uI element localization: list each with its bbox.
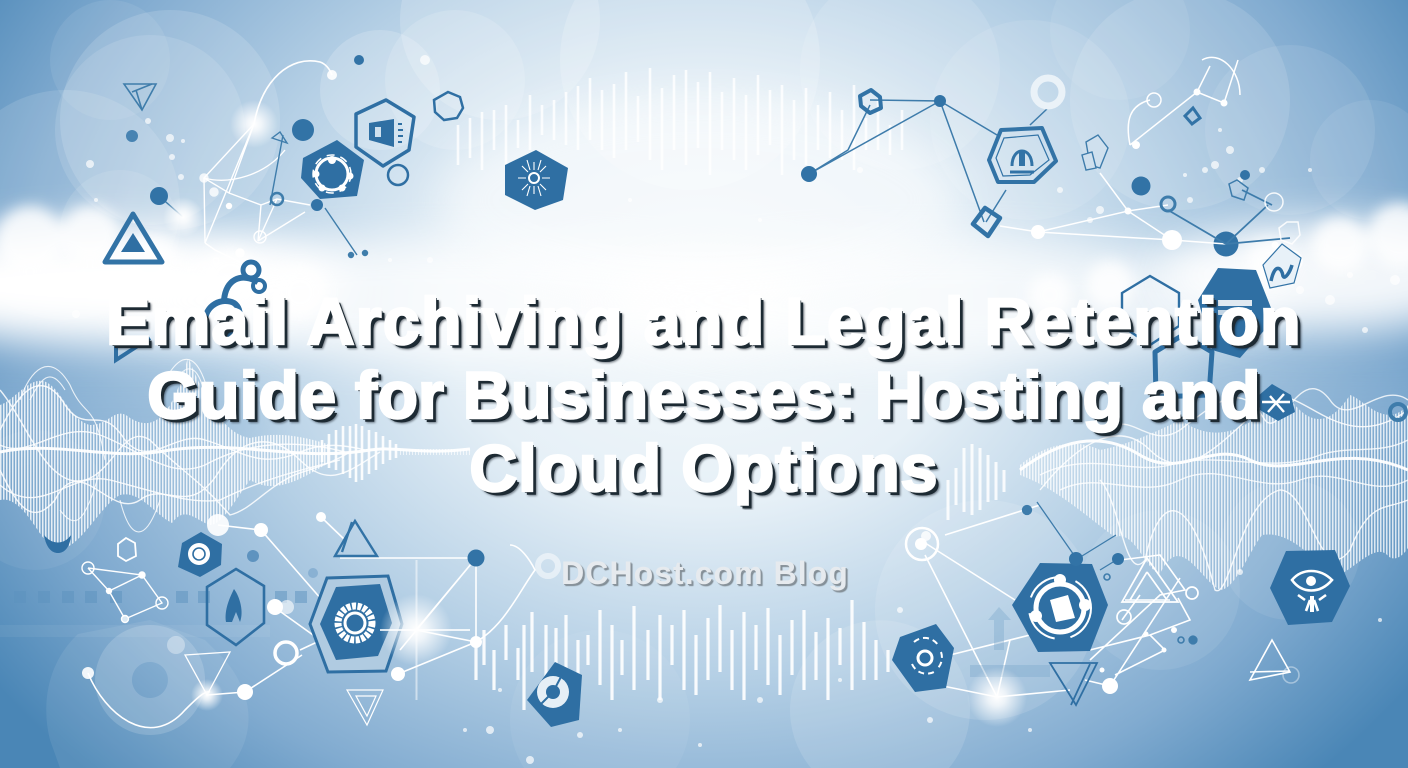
outline polygons top left [388, 92, 463, 185]
network: top left [200, 61, 337, 264]
hexagon: face [178, 532, 222, 577]
ring white [275, 642, 297, 664]
flares: top left [163, 100, 278, 237]
bottom hexagon icon [527, 662, 582, 727]
blue links bottom right [1022, 502, 1197, 644]
triangle top bottom-left [335, 521, 377, 556]
outline hex dark right [1229, 180, 1248, 200]
title: Cloud Options [470, 431, 938, 505]
dots top left [126, 55, 364, 211]
fog band [0, 100, 1408, 360]
small diamond [1185, 108, 1200, 124]
hexagon outline light [1122, 276, 1179, 345]
nodes on hexagon [1069, 552, 1124, 566]
blue nodes top right [801, 95, 1250, 256]
cloud icon rings [205, 262, 265, 335]
large hexagon icon [1012, 563, 1108, 652]
title [106, 285, 1303, 510]
triangle dark inverted [1050, 663, 1097, 705]
node bottom right [1102, 678, 1118, 694]
squiggle hexagon [1263, 244, 1301, 288]
white nodes top right [1031, 88, 1278, 250]
pale ring near subtitle [538, 556, 558, 576]
dot [247, 550, 484, 578]
clouds: top [0, 0, 1408, 320]
dashed strip left [14, 591, 307, 603]
network: top right blue [809, 100, 1048, 222]
ring light [1034, 78, 1062, 106]
ring node white [906, 528, 938, 560]
audio bars: top [458, 68, 902, 175]
ghost arrows [970, 607, 1050, 677]
hexagon: outline rocket [207, 569, 264, 645]
blue haze under fog [0, 385, 1408, 445]
triangle behind title [116, 325, 150, 360]
gear hexagon [310, 576, 402, 672]
hexagon outline dark [1155, 335, 1212, 397]
small hex top right [860, 90, 881, 113]
triangle outline icon [124, 84, 156, 110]
title: Email Archiving and Legal Retention [106, 285, 1302, 358]
hexagon icon: outline speaker [356, 100, 414, 166]
network: bottom right white [922, 505, 1190, 697]
network: bottom left small [82, 538, 168, 622]
diamond node [973, 208, 1000, 236]
blue drop in wave [44, 535, 71, 553]
small hexagon icon bottom right [892, 624, 954, 692]
blog label: DCHost.com Blog [561, 555, 849, 591]
hexagon icon: ring [301, 140, 364, 199]
flare bottom right [967, 667, 1027, 727]
eye hexagon [1270, 550, 1350, 625]
network: top right white [1000, 57, 1240, 244]
pale cube cluster [1082, 135, 1108, 170]
hexagon filled server [1198, 268, 1275, 358]
triangle icon: filled [105, 214, 162, 262]
network: top left blue links [159, 132, 368, 258]
hexagon icon: alarm [989, 128, 1056, 182]
cloud bumps on fog [0, 203, 1408, 318]
title: Guide for Businesses: Hosting and [147, 358, 1261, 432]
small white nodes [1100, 627, 1177, 672]
audio bars: bottom [476, 600, 888, 710]
white nodes bottom left [82, 512, 482, 700]
triangle far right bottom [1250, 640, 1299, 683]
wave band: right [948, 389, 1408, 591]
sunburst hexagon [505, 150, 568, 210]
flares bottom left [191, 560, 470, 711]
wave band: left [0, 357, 472, 550]
far right blue icon [1390, 404, 1406, 420]
triangle white right [1117, 558, 1198, 624]
ghost gear bottom left [0, 620, 270, 768]
blue links right [1161, 190, 1290, 244]
clouds: bottom [0, 430, 1360, 768]
network: bottom left white [88, 516, 535, 728]
outline hexes far right [1265, 193, 1302, 271]
snowflake hexagon [1258, 384, 1295, 421]
